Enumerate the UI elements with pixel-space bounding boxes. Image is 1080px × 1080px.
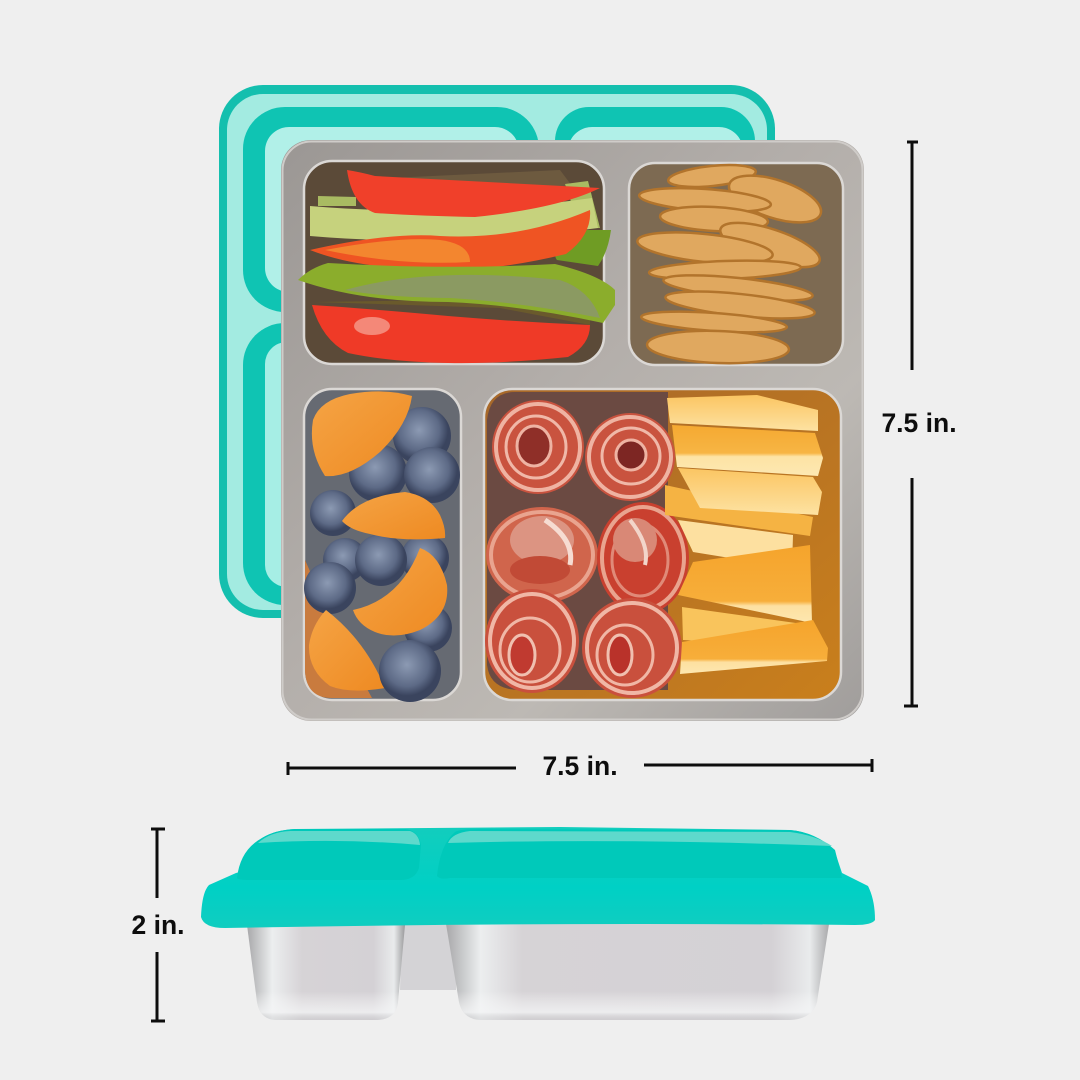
celery stick xyxy=(310,198,598,240)
lid highlight left xyxy=(258,831,420,845)
roll 5 xyxy=(485,589,579,693)
compartment: crackers xyxy=(629,161,843,365)
teal lid behind tray xyxy=(219,85,775,618)
blueberries xyxy=(304,407,460,652)
green pepper large xyxy=(298,263,615,323)
dimension: depth, left side xyxy=(131,829,185,1021)
mandarin segment, bottom xyxy=(309,610,385,691)
compartment: vegetables xyxy=(298,161,615,364)
salami rolls xyxy=(485,400,689,698)
steel base, rear xyxy=(400,925,456,990)
lid body xyxy=(201,827,875,928)
mandarin segment, lower xyxy=(353,548,447,636)
celery behind xyxy=(318,181,600,228)
cheese slices xyxy=(665,395,828,674)
label: depth 2 in.: 2 in. xyxy=(131,910,185,940)
lid right raised panel xyxy=(437,829,842,879)
steel base, right compartment xyxy=(446,924,829,1020)
side view of lunchbox xyxy=(201,827,875,1020)
dimension: width, below tray xyxy=(288,751,872,781)
lid highlight right xyxy=(448,831,832,846)
back sliver xyxy=(390,170,572,186)
orange highlight on pepper xyxy=(325,239,470,263)
roll 3 xyxy=(486,507,598,603)
roll 2 xyxy=(585,413,675,501)
compartment: salami and cheese xyxy=(484,389,841,700)
steel base, left compartment xyxy=(247,925,405,1020)
compartment: fruit xyxy=(304,389,461,702)
blueberry front xyxy=(379,640,441,702)
green pepper texture xyxy=(345,275,600,318)
red pepper strip, top xyxy=(347,170,600,217)
lid left raised panel xyxy=(237,829,421,880)
green pepper small xyxy=(555,230,611,266)
roll 4 xyxy=(597,502,689,614)
mandarin segment, center xyxy=(342,492,445,539)
cracker stack xyxy=(667,161,757,191)
red pepper strip, middle xyxy=(310,210,590,270)
back pepper lower xyxy=(315,300,590,325)
label: height 7.5 in.: 7.5 in. xyxy=(881,408,957,438)
dimension: height, right side xyxy=(881,142,957,706)
stainless tray, top view xyxy=(281,140,864,721)
roll 6 xyxy=(582,598,682,698)
roll 1 xyxy=(492,400,584,494)
red pepper strip, bottom xyxy=(312,305,590,363)
mandarin segment, top xyxy=(312,391,412,476)
label: width 7.5 in.: 7.5 in. xyxy=(542,751,618,781)
highlight on pepper xyxy=(354,317,390,335)
